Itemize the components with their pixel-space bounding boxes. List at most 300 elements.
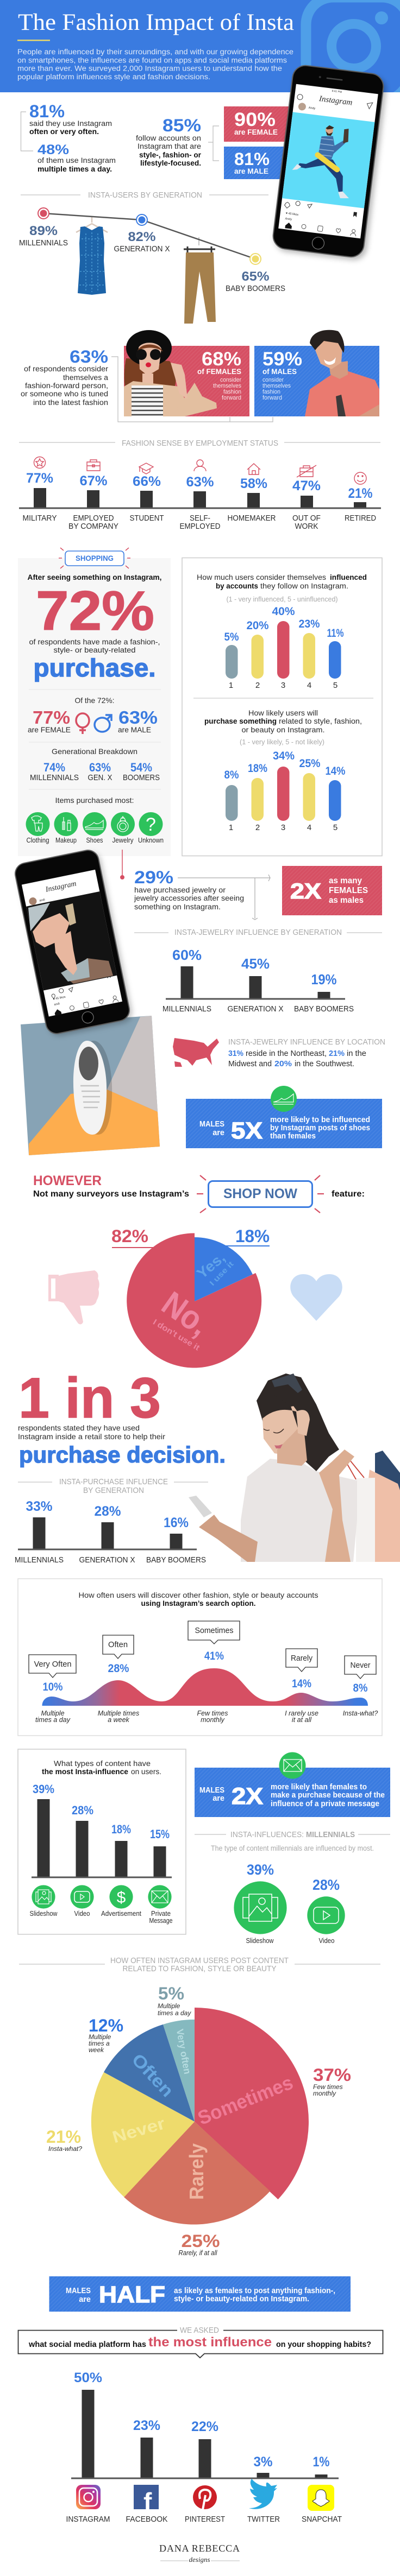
phone with jewelry post: andi [54, 1002, 60, 1007]
frequency labels text [34, 1626, 371, 1670]
captions: monthly [201, 1716, 225, 1724]
line chart: insta-users by generation: GENERATION X [114, 245, 170, 254]
labels: social platforms: FACEBOOK [126, 2515, 168, 2524]
bar chart: likelihood to purchase: 14% [325, 765, 346, 777]
heading: how often users post content: HOW OFTEN INSTAGRAM USERS POST CONTENT [110, 1956, 289, 1965]
stat: 63% fashion-forward: fashion-forward person, [25, 382, 108, 390]
section: insta-influences millennials: 28% [312, 1877, 340, 1893]
intro paragraph [17, 48, 293, 81]
stat: follow fashion accounts: follow accounts on [136, 134, 201, 142]
bar chart: how influenced by accounts: 1 [229, 681, 233, 690]
section: insta-influences millennials: Video [318, 1936, 335, 1945]
callout: males 5x shoes: more likely to be influenced [270, 1116, 370, 1124]
panel: content types: the most Insta-influence [42, 1767, 128, 1776]
stat: instagram use frequency: often or very often. [29, 128, 99, 136]
captions: Multiple [41, 1710, 65, 1717]
bar chart: how influenced by accounts: by accounts [216, 581, 258, 590]
text: 72% purchase statement: purchase. [34, 654, 155, 682]
panel: influence and purchase likelihood [182, 558, 382, 856]
items purchased most: Clothing [26, 837, 49, 844]
text: jewelry influence by location: in the Southwest. [295, 1059, 354, 1068]
stat: 1 in 3: Instagram inside a retail store to help their [18, 1432, 165, 1441]
badge: shopping [59, 548, 130, 568]
pie chart: posting frequency [46, 1984, 351, 2257]
pie chart: posting frequency: Rarely [185, 2143, 208, 2200]
intro paragraph: more than ever. We surveyed 2,000 Instagram users to understand how the [17, 65, 282, 73]
pie chart: shop now usage: 82% [111, 1226, 148, 1246]
callout: 90% female: are FEMALE [234, 128, 278, 136]
captions: Few times [197, 1710, 228, 1717]
icons: employment status [34, 457, 366, 484]
callout: 2x as many females: as many [329, 876, 362, 885]
callout: males 5x shoes: by Instagram posts of shoes [270, 1124, 370, 1132]
heading: insta-purchase influence by generation: BY GENERATION [83, 1486, 144, 1495]
text: 72% purchase statement: of respondents have made a fashion-, [29, 637, 160, 646]
intro paragraph: popular platform influences style and fashion decisions. [17, 73, 210, 81]
stat: instagram use frequency: of them use Instagram [38, 156, 116, 164]
heading: insta-users by generation: INSTA-USERS BY GENERATION [88, 191, 202, 200]
icon: trousers on hanger [184, 237, 216, 324]
bar chart: jewelry influence by generation: MILLENNIALS [162, 1005, 211, 1014]
stat: gender split of the 72% [28, 696, 158, 734]
labels: social platforms: PINTEREST [185, 2515, 225, 2524]
panel: content types: Advertisement [101, 1910, 141, 1917]
heading: insta-purchase influence by generation [18, 1477, 208, 1495]
icon: pinterest [193, 2485, 217, 2510]
logo: dana rebecca designs [159, 2543, 240, 2564]
stat: follow fashion accounts [136, 116, 219, 167]
callout: males 2x private message: influence of a private message [271, 1800, 379, 1808]
pie chart: posting frequency: times a day [158, 2009, 191, 2017]
bar chart: purchase influence by generation: 16% [164, 1515, 189, 1530]
bar chart: purchase influence by generation: 28% [95, 1504, 121, 1519]
section: insta-influences millennials: MILLENNIALS [306, 1830, 355, 1839]
items purchased most: Shoes [86, 837, 103, 844]
pie chart: shop now usage: 18% [235, 1226, 270, 1246]
labels: social platforms [66, 2515, 342, 2524]
bar chart: jewelry influence by generation: 60% [172, 947, 202, 963]
text: 72% purchase statement: 72% [36, 580, 154, 642]
stat: follow fashion accounts: 85% [162, 116, 201, 135]
bar chart: social platforms [71, 2370, 339, 2479]
callout: 59% of males with portrait [254, 330, 379, 416]
callout: 81% male [224, 147, 290, 179]
percentages: 14% [292, 1678, 311, 1690]
percentages: 28% [108, 1662, 129, 1675]
frequency labels text: Never [350, 1661, 371, 1670]
items purchased most [26, 796, 164, 844]
panel: content types: on users. [131, 1767, 161, 1776]
labels: social platforms: INSTAGRAM [66, 2515, 110, 2524]
items purchased most: Jewelry [112, 837, 134, 844]
photo: woman with phone and shopping bags [189, 1374, 400, 1562]
bar chart: likelihood to purchase: 8% [224, 769, 239, 781]
header banner [0, 0, 400, 100]
stat: 1 in 3: 1 in 3 [18, 1366, 161, 1430]
bar chart: employment status: 47% [292, 478, 321, 493]
bar chart: social platforms: 50% [74, 2370, 102, 2385]
line chart: insta-users by generation: 89% [29, 224, 58, 238]
bar chart: jewelry influence by generation: BABY BOOMERS [294, 1005, 354, 1014]
icon: facebook: f [143, 2488, 152, 2516]
pie chart: shop now usage: No, [155, 1284, 216, 1343]
pie chart: posting frequency: Multiple [158, 2002, 180, 2010]
bar chart: employment status: EMPLOYED [73, 514, 114, 523]
captions: Multiple times [98, 1710, 139, 1717]
logo: dana rebecca designs: designs [189, 2555, 210, 2564]
bar chart: likelihood to purchase: 1 [229, 823, 233, 832]
section: insta-influences millennials: INSTA-INFLUENCES: [230, 1830, 304, 1839]
stat: 1 in 3 [18, 1366, 226, 1467]
bar chart: employment status: HOMEMAKER [227, 514, 276, 523]
text: jewelry influence by location: 31% [228, 1049, 243, 1058]
line chart: insta-users by generation: BABY BOOMERS [226, 284, 285, 293]
frequency labels text: Sometimes [195, 1626, 234, 1635]
bar chart: content types: 39% [33, 1782, 54, 1796]
callout: 68% of females with portrait: fashion [223, 389, 241, 395]
callout: males half as likely: style- or beauty-related on Instagram. [174, 2295, 309, 2303]
bar chart: likelihood to purchase: 25% [299, 757, 321, 770]
panel: content types: Slideshow [29, 1910, 58, 1917]
icon: facebook [134, 2485, 159, 2516]
bar chart: employment status: 67% [79, 473, 108, 489]
bar chart: how influenced by accounts: 11% [327, 627, 344, 640]
captions: Insta-what? [343, 1710, 378, 1717]
labels: social platforms: SNAPCHAT [302, 2515, 342, 2524]
line chart: insta-users by generation: 82% [128, 230, 155, 244]
captions: I rarely use [285, 1710, 318, 1717]
bar chart: employment status: 63% [186, 474, 214, 490]
bar chart: how influenced by accounts: 5% [224, 631, 239, 643]
icon: dress on hanger [76, 217, 108, 295]
area chart: frequency wave [42, 1668, 368, 1706]
icons: content types [32, 1885, 172, 1909]
callout: males 2x private message: MALES [199, 1786, 224, 1795]
pie chart: shop now usage: I don't use it [151, 1318, 201, 1352]
callout: males 2x private message: make a purchase because of the [271, 1791, 385, 1800]
callout: males 2x private message: 2X [232, 1783, 263, 1809]
panel: content types: What types of content have [54, 1759, 151, 1768]
stat: generational breakdown: 54% [130, 761, 152, 774]
heading: how often users post content [19, 1956, 380, 1973]
line chart: insta-users by generation [19, 208, 285, 293]
bar chart: employment status: 58% [240, 476, 267, 491]
pie chart: posting frequency: 21% [46, 2127, 81, 2147]
labels: social platforms: TWITTER [247, 2515, 280, 2524]
bar chart: social platforms: 23% [133, 2418, 160, 2433]
phone with instagram post [271, 64, 388, 262]
bar chart: employment status: WORK [295, 522, 318, 531]
stat: follow fashion accounts: lifestyle-focused. [140, 159, 201, 167]
phone with instagram post: 9:41 PM [332, 90, 342, 94]
items purchased most: Makeup [55, 837, 77, 844]
callout: 68% of females with portrait: 68% [202, 349, 241, 370]
callout: males half as likely: are [79, 2295, 91, 2304]
question box: we asked [18, 2326, 383, 2358]
stat: generational breakdown: 74% [43, 761, 65, 774]
pie chart: posting frequency: times a [89, 2040, 110, 2047]
callout: males 5x shoes: are [212, 1129, 224, 1137]
icon: twitter [249, 2479, 277, 2509]
pie chart: shop now usage: Yes, [193, 1249, 228, 1282]
captions: a week [108, 1716, 130, 1724]
bar chart: how influenced by accounts: they follow on Instagram. [260, 581, 348, 590]
stat: gender split of the 72%: are FEMALE [28, 725, 71, 734]
stat: follow fashion accounts: Instagram that are [138, 142, 201, 150]
pie chart: shop now usage [111, 1226, 270, 1368]
heading: insta-jewelry influence by generation: INSTA-JEWELRY INFLUENCE BY GENERATION [174, 928, 342, 937]
bar chart: likelihood to purchase: or beauty on Instagram. [241, 725, 325, 734]
panel: shopping [18, 548, 171, 856]
callout: 90% female [224, 106, 292, 142]
bar chart: employment status: 21% [348, 486, 373, 501]
bar chart: employment status: SELF- [190, 514, 210, 523]
captions: it at all [292, 1716, 312, 1724]
heading: insta-purchase influence by generation: INSTA-PURCHASE INFLUENCE [59, 1477, 168, 1486]
bar chart: jewelry influence by generation: GENERATION X [227, 1005, 284, 1014]
phone with jewelry post: andi [39, 898, 45, 903]
bar chart: likelihood to purchase: How likely users will [248, 708, 318, 717]
stat: generational breakdown: MILLENNIALS [30, 774, 79, 782]
panel: content types [18, 1749, 186, 1934]
icon: snapchat [308, 2485, 334, 2511]
callout: males 5x shoes: than females [270, 1132, 316, 1141]
icon: instagram [76, 2485, 101, 2509]
callout: 68% of females with portrait: themselves [213, 383, 241, 389]
stat: 1 in 3: respondents stated they have used [18, 1423, 140, 1432]
callout: 59% of males with portrait: 59% [262, 349, 302, 370]
pie chart: posting frequency: monthly [313, 2090, 336, 2097]
text: jewelry influence by location: 20% [274, 1059, 292, 1068]
callout: males 5x shoes: 5X [231, 1118, 262, 1144]
bar chart: purchase influence by generation: MILLENNIALS [15, 1556, 64, 1565]
callout: 2x as many females [282, 866, 382, 915]
bar chart: likelihood to purchase: 3 [281, 823, 285, 832]
logo: dana rebecca designs: DANA REBECCA [159, 2543, 240, 2554]
text: jewelry influence by location: reside in the Northeast, [246, 1049, 327, 1058]
callout: 2x as many females: FEMALES [329, 886, 368, 895]
heading: however shop now: SHOP NOW [223, 1186, 297, 1201]
pie chart: posting frequency: Often [128, 2049, 178, 2101]
callout: 68% of females with portrait [124, 330, 249, 416]
bar chart: purchase influence by generation: GENERATION X [79, 1556, 135, 1565]
bar chart: content types: 28% [72, 1803, 93, 1817]
callout: males half as likely: as likely as females to post anything fashion-, [174, 2287, 335, 2295]
stat: 29% jewelry purchases [120, 850, 244, 911]
stat: instagram use frequency [21, 102, 116, 173]
percentages: 10% [42, 1681, 63, 1693]
stat: 63% fashion-forward [21, 347, 273, 422]
pie chart: shop now usage: I use it [208, 1259, 235, 1287]
bar chart: social platforms: 1% [313, 2454, 329, 2470]
panel: search option discovery: How often users will discover other fashion, style or beauty accounts [78, 1591, 318, 1599]
stat: 29% jewelry purchases: have purchased jewelry or [134, 885, 226, 894]
pie chart: posting frequency: 37% [313, 2065, 351, 2085]
callout: males 5x shoes [186, 1086, 382, 1148]
pie chart: posting frequency: Few times [313, 2083, 343, 2091]
intro paragraph: People are influenced by their surroundings, and with our growing dependence [17, 48, 293, 56]
callout: males half as likely: HALF [99, 2282, 165, 2308]
bar chart: likelihood to purchase: (1 - very likely, 5 - not likely) [240, 738, 324, 746]
arrows from 29% stat [178, 875, 270, 920]
panel: search option discovery [18, 1579, 382, 1736]
shoe on colour-block panel [21, 1016, 160, 1155]
bar chart: how influenced by accounts: 3 [281, 681, 285, 690]
captions [35, 1710, 378, 1724]
stat: generational breakdown [30, 747, 160, 782]
stat: follow fashion accounts: style-, fashion- or [139, 151, 202, 159]
stat: instagram use frequency: 48% [38, 142, 69, 157]
callout: 2x as many females: 2X [290, 879, 321, 903]
stat: 29% jewelry purchases: something on Instagram. [134, 902, 221, 911]
intro paragraph: on smartphones, the influences are found on apps and social media platforms [17, 56, 287, 64]
stat: generational breakdown: BOOMERS [123, 774, 160, 782]
text: jewelry influence by location: in the [347, 1049, 366, 1058]
bar chart: employment status: RETIRED [345, 514, 376, 523]
bar chart: how influenced by accounts: How much users consider themselves [197, 573, 326, 581]
callout: 81% male: are MALE [234, 167, 268, 175]
text: jewelry influence by location: Midwest and [228, 1059, 272, 1068]
stat: 63% fashion-forward: 63% [70, 347, 108, 366]
callout: 59% of males with portrait: themselves [262, 383, 291, 389]
callout: 59% of males with portrait: consider [262, 377, 284, 383]
frequency labels text: Rarely [291, 1654, 312, 1663]
panel: search option discovery: using Instagram’s search option. [141, 1599, 255, 1607]
stat: instagram use frequency: multiple times a day. [38, 165, 112, 173]
callout: 68% of females with portrait: of FEMALES [197, 367, 241, 376]
bar chart: likelihood to purchase: purchase something [204, 717, 277, 725]
callout: 2x as many females: as males [329, 896, 364, 905]
callout: males 2x private message: more likely than females to [271, 1783, 367, 1792]
heading: how often users post content: RELATED TO FASHION, STYLE OR BEAUTY [123, 1964, 276, 1973]
bar chart: content types: 18% [111, 1822, 131, 1836]
text: 72% purchase statement: style- or beauty-related [53, 645, 136, 654]
title: The Fashion Impact of Insta [18, 10, 294, 35]
frequency labels text: Often [108, 1640, 128, 1649]
bar chart: jewelry influence by generation: 45% [241, 955, 270, 972]
section: insta-influences millennials: 39% [247, 1862, 274, 1878]
callout: males half as likely [49, 2276, 351, 2312]
items purchased most: Items purchased most: [55, 796, 134, 805]
bar chart: employment status: EMPLOYED [179, 522, 221, 531]
bar chart: likelihood to purchase: 5 [333, 823, 338, 832]
stat: generational breakdown: Generational Breakdown [52, 747, 138, 756]
callouts: frequency labels [29, 1621, 376, 1679]
callout: 90% female: 90% [234, 109, 276, 130]
text: jewelry influence by location: INSTA-JEWELRY INFLUENCE BY LOCATION [228, 1037, 385, 1047]
pie chart: posting frequency: Sometimes [195, 2071, 296, 2129]
icon: heart [290, 1274, 342, 1321]
bar chart: how influenced by accounts: 23% [299, 618, 320, 630]
question box: we asked: the most influence [148, 2335, 272, 2350]
bar chart: how influenced by accounts: 5 [333, 681, 338, 690]
question box: we asked: on your shopping habits? [276, 2340, 371, 2349]
icon: video [307, 1896, 345, 1934]
stat: gender split of the 72%: Of the 72%: [75, 696, 114, 705]
stat: 63% fashion-forward: or someone who is tuned [21, 390, 108, 398]
text: 72% purchase statement [27, 573, 162, 682]
callout: 59% of males with portrait: forward [262, 395, 282, 401]
bar chart: employment status: BY COMPANY [68, 522, 118, 531]
bar chart: how influenced by accounts: 20% [247, 619, 269, 632]
callout: 81% male: 81% [234, 149, 270, 169]
text: jewelry influence by location: 21% [329, 1049, 345, 1058]
pie chart: posting frequency: Multiple [89, 2033, 111, 2041]
pie chart: posting frequency: Very often [174, 2028, 193, 2075]
bar chart: likelihood to purchase: 34% [273, 750, 295, 762]
phone with instagram post: Instagram [318, 94, 353, 107]
pie chart: posting frequency: 12% [89, 2016, 123, 2035]
bar chart: likelihood to purchase: 2 [255, 823, 260, 832]
icon: slideshow [234, 1881, 287, 1934]
bar chart: purchase influence by generation: 33% [26, 1499, 52, 1514]
stat: instagram use frequency: said they use Instagram [29, 119, 112, 128]
percentages: 8% [353, 1682, 368, 1694]
percentages [42, 1650, 368, 1694]
heading: fashion sense by employment status: FASHION SENSE BY EMPLOYMENT STATUS [122, 439, 278, 448]
bar chart: jewelry influence by generation [162, 947, 354, 1014]
stat: 29% jewelry purchases: 29% [134, 868, 173, 887]
section: insta-influences millennials [195, 1830, 390, 1945]
callout: males half as likely: MALES [66, 2287, 91, 2295]
stat: gender split of the 72%: are MALE [118, 725, 151, 734]
icon: thumbs down [48, 1270, 99, 1324]
callout: males 5x shoes: MALES [199, 1120, 224, 1129]
phone with instagram post: Andy [285, 217, 292, 221]
phone with jewelry post [13, 848, 134, 1038]
callout: 68% of females with portrait: consider [220, 377, 241, 383]
section: insta-influences millennials: Slideshow [246, 1936, 274, 1945]
bar chart: employment status: 66% [133, 474, 161, 489]
text: jewelry influence by location [228, 1037, 385, 1068]
bar chart: social platforms: 3% [253, 2454, 273, 2470]
bar chart: likelihood to purchase: related to style, fashion, [279, 717, 362, 725]
callout: males 2x private message [195, 1752, 390, 1817]
bar chart: social platforms: 22% [191, 2419, 218, 2434]
items purchased most: ? [146, 814, 156, 835]
pie chart: posting frequency: Never [110, 2113, 167, 2147]
heading: however shop now: HOWEVER [33, 1173, 102, 1188]
frequency labels text: Very Often [34, 1660, 72, 1669]
heading: however shop now: Not many surveyors use Instagram’s [33, 1189, 189, 1199]
stat: 63% fashion-forward: themselves a [63, 374, 109, 382]
bar chart: purchase influence by generation [15, 1499, 206, 1565]
bar chart: likelihood to purchase: 18% [248, 762, 267, 775]
heading: however shop now [33, 1173, 365, 1213]
panel: content types: Private [151, 1910, 171, 1917]
phone with instagram post: ♥ 45 likes [285, 212, 299, 217]
callout: males 2x private message: are [212, 1794, 224, 1803]
stat: instagram use frequency: 81% [29, 102, 65, 121]
bar chart: likelihood to purchase [204, 708, 362, 832]
callout: 59% of males with portrait: fashion [262, 389, 280, 395]
pie chart: posting frequency: week [89, 2046, 104, 2054]
bar chart: employment status: STUDENT [129, 514, 164, 523]
line chart: insta-users by generation: 65% [241, 269, 270, 284]
bar chart: purchase influence by generation: BABY BOOMERS [146, 1556, 206, 1565]
stat: generational breakdown: 63% [89, 761, 111, 774]
stat: 29% jewelry purchases: jewelry accessories after seeing [134, 894, 244, 902]
section: insta-influences millennials: The type of content millennials are influenced by most. [211, 1844, 374, 1852]
bar chart: employment status [19, 471, 381, 531]
text: 72% purchase statement: After seeing something on Instagram, [27, 573, 162, 581]
bar chart: how influenced by accounts: 2 [255, 681, 260, 690]
stat: 1 in 3: purchase decision. [19, 1442, 226, 1467]
bar chart: employment status: 77% [26, 471, 53, 486]
stat: 63% fashion-forward: of respondents consider [24, 365, 109, 373]
panel: content types: Video [74, 1910, 90, 1917]
phone with jewelry post: Instagram [45, 879, 77, 894]
